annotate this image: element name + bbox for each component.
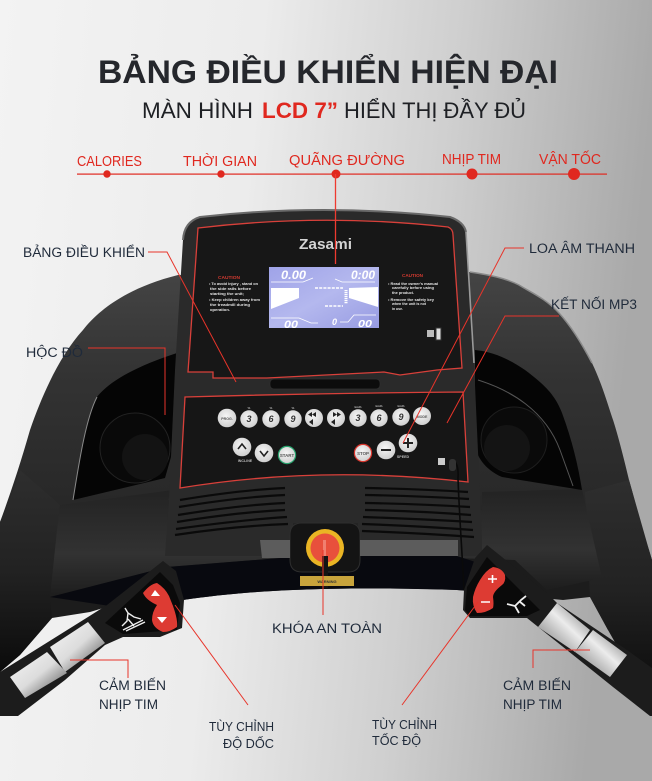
top row buttons: km/h — [354, 405, 362, 409]
bottom row buttons: STOP — [357, 451, 369, 456]
USB port icon — [427, 328, 441, 340]
callout: bảng điều khiển: BẢNG ĐIỀU KHIỂN — [23, 245, 145, 260]
top row buttons: % — [270, 406, 273, 410]
subtitle: HIỂN THỊ ĐẦY ĐỦ — [344, 98, 526, 123]
callout: khóa an toàn: KHÓA AN TOÀN — [272, 621, 382, 636]
top row buttons: 9 — [398, 412, 404, 422]
left post — [0, 470, 60, 672]
left cup holder — [73, 353, 177, 500]
top row buttons: km/h — [375, 404, 383, 408]
runner icon — [507, 596, 526, 613]
tray slot — [270, 379, 380, 389]
left caution note: CAUTION — [218, 275, 240, 280]
right caution note: • Remove the safety key — [388, 298, 434, 302]
control panel outline — [180, 392, 468, 488]
callout: cảm biến nhịp tim phải: CẢM BIẾN — [503, 678, 571, 693]
left caution note: starting the unit; — [210, 292, 244, 296]
top row buttons: MODE — [417, 415, 428, 419]
arms and body silhouette — [0, 272, 652, 672]
top row buttons: % — [292, 406, 295, 410]
LCD screen: 0:00 — [351, 268, 375, 282]
bottom row buttons: START — [280, 453, 294, 458]
subtitle — [142, 98, 526, 123]
left lower panel — [50, 490, 293, 597]
speed buttons — [473, 567, 505, 613]
callout: tùy chỉnh độ dốc — [175, 605, 274, 751]
top row buttons: km/h — [397, 404, 405, 408]
LCD screen: 0 — [332, 317, 337, 327]
timeline line and dots — [77, 168, 607, 180]
callout: bảng điều khiển — [23, 245, 236, 382]
right caution note: • Read the owner's manual — [388, 282, 438, 286]
callout: loa âm thanh: LOA ÂM THANH — [529, 241, 635, 256]
audio cable — [438, 458, 464, 590]
callout: tùy chỉnh tốc độ — [372, 602, 478, 748]
top row buttons: 9 — [290, 414, 296, 424]
callout: khóa an toàn — [272, 550, 382, 636]
top row buttons: % — [248, 406, 251, 410]
left caution note — [209, 275, 260, 312]
metrics timeline — [77, 150, 607, 264]
metric labels: VẬN TỐC — [539, 150, 601, 168]
callout: cảm biến nhịp tim phải: NHỊP TIM — [503, 697, 562, 712]
bottom row buttons: SPEED — [397, 455, 409, 459]
right caution note: in use. — [392, 307, 403, 311]
right caution note: CAUTION — [402, 273, 423, 278]
treadmill console — [0, 210, 652, 716]
callout: tùy chỉnh độ dốc: TÙY CHỈNH — [209, 719, 274, 734]
left caution note: • To avoid injury , stand on — [209, 282, 258, 286]
subtitle: LCD 7” — [262, 98, 338, 123]
console rim — [183, 210, 466, 240]
metric labels: CALORIES — [77, 154, 142, 170]
top row buttons: 6 — [268, 414, 274, 424]
callout: hộc đồ: HỘC ĐỒ — [26, 345, 83, 360]
callout: cảm biến nhịp tim trái: NHỊP TIM — [99, 697, 158, 712]
left grip — [0, 561, 184, 716]
top row buttons: 3 — [246, 414, 252, 424]
right post — [585, 480, 652, 700]
right cup holder — [475, 350, 582, 490]
runner icon — [122, 608, 145, 631]
left caution note: the treadmill during — [210, 303, 250, 307]
callout: kết nối MP3 — [447, 297, 637, 423]
callout: tùy chỉnh tốc độ: TÙY CHỈNH — [372, 717, 437, 732]
right caution note: carefully before using — [392, 286, 434, 290]
right caution note: the product. — [392, 291, 414, 295]
left caution note: operation. — [210, 308, 230, 312]
title: BẢNG ĐIỀU KHIỂN HIỆN ĐẠI — [98, 54, 558, 90]
LCD screen — [269, 267, 379, 331]
right lower panel — [358, 489, 602, 590]
right caution note: when the unit is not — [391, 302, 427, 306]
speaker vents — [175, 488, 474, 537]
callout: cảm biến nhịp tim trái: CẢM BIẾN — [99, 678, 166, 693]
callout: cảm biến nhịp tim trái — [70, 660, 166, 712]
right caution note — [388, 273, 438, 311]
callout: hộc đồ — [26, 345, 165, 415]
bottom row buttons — [233, 434, 417, 464]
metric labels: QUÃNG ĐƯỜNG — [289, 152, 405, 169]
subtitle: MÀN HÌNH — [142, 98, 253, 123]
connector to LCD — [334, 174, 336, 264]
centre dark band — [50, 555, 540, 606]
top row buttons: 6 — [376, 413, 382, 423]
metric labels: THỜI GIAN — [183, 153, 257, 170]
top row buttons: 3 — [355, 413, 361, 423]
LCD screen: 00 — [358, 319, 373, 330]
left caution note: • Keep children away from — [209, 298, 260, 302]
safety key bay: WARNING — [317, 579, 337, 584]
callout: tùy chỉnh độ dốc: ĐỘ DỐC — [223, 736, 274, 751]
brand logo: Zasami — [299, 237, 352, 253]
LCD screen: 00 — [284, 319, 299, 331]
right arm highlight — [470, 272, 592, 363]
incline buttons — [143, 583, 177, 632]
bottom row buttons: INCLINE — [238, 459, 253, 463]
callout: tùy chỉnh tốc độ: TỐC ĐỘ — [372, 733, 421, 748]
console housing — [165, 210, 482, 556]
metric labels — [77, 150, 601, 170]
metric labels: NHỊP TIM — [442, 152, 501, 168]
display panel outline — [188, 220, 462, 378]
top row buttons — [218, 404, 431, 428]
left caution note: the side rails before — [210, 287, 251, 291]
callout: loa âm thanh — [403, 241, 635, 443]
LCD screen: 0.00 — [281, 268, 306, 282]
top row buttons: PROG. — [221, 417, 233, 421]
right grip — [463, 545, 652, 716]
safety key bay — [260, 523, 458, 588]
callout: cảm biến nhịp tim phải — [503, 650, 590, 712]
callout: kết nối MP3: KẾT NỐI MP3 — [551, 297, 637, 312]
